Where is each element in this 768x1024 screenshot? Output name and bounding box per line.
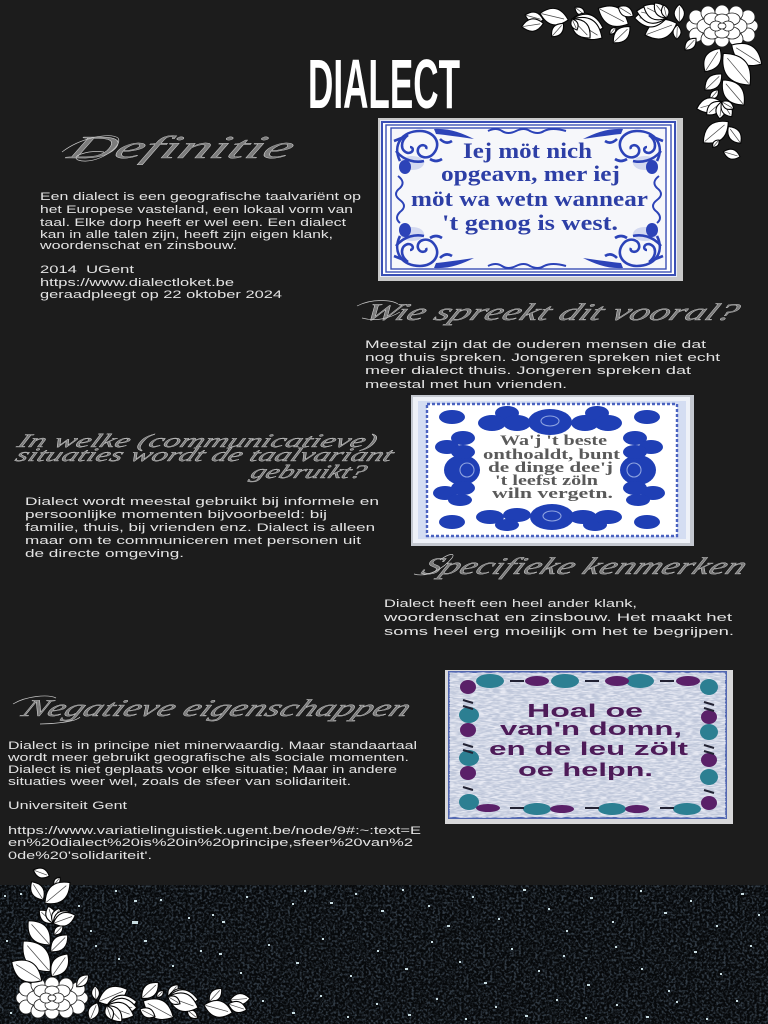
tile 1 text [411,138,648,235]
tile 3 text: van'n domn, [500,719,682,739]
text block: negatieve eigenschappen: situaties weer wel, zoals de sfeer van solidariteit. [8,776,351,788]
text block: negatieve eigenschappen: https://www.variatielinguistiek.ugent.be/node/9#:~:text=E [8,825,421,837]
tile 2 text: Wa'j 't beste [500,433,608,449]
heading: in welke situaties: situaties wordt de taalvariant [12,445,398,466]
tile 2 text [483,433,620,502]
text block: negatieve eigenschappen [6,740,421,862]
text block: specifieke kenmerken: Dialect heeft een heel ander klank, [384,598,637,610]
tile 1: blue delft saying [378,118,683,281]
text block: definitie [38,191,361,301]
tile 1 text: Iej möt nich [463,138,592,163]
heading: in welke situaties [12,431,398,483]
tile 1 text: möt wa wetn wannear [411,186,648,211]
section: definitie [38,131,361,301]
text block: specifieke kenmerken [382,598,734,638]
text block: definitie: 2014 UGent [40,264,134,276]
text block: definitie: kan in alle talen zijn, heeft zijn eigen klank, [40,229,333,241]
heading: in welke situaties: gebruikt? [247,462,371,483]
text block: definitie: woordenschat en zinsbouw. [38,240,237,252]
heading: wie spreekt: Wie spreekt dit vooral? [359,298,746,326]
tile 3 text: en de leu zölt [489,739,688,759]
text block: in welke situaties: de directe omgeving. [25,548,184,560]
heading: specifieke kenmerken [414,552,753,580]
tile 2 text: 't leefst zöln [495,473,598,489]
text block: wie spreekt: nog thuis spreken. Jongeren spreken niet echt [365,352,720,364]
text block: definitie: het Europese vasteland, een lokaal vorm van [40,204,353,216]
text block: in welke situaties: familie, thuis, bij vrienden enz. Dialect is alleen [25,522,375,534]
tile 1 text: opgeavn, mer iej [441,161,620,186]
text block: definitie: Een dialect is een geografische taalvariënt op [40,191,361,203]
tile 2 text: wiln vergetn. [492,486,613,502]
text block: in welke situaties: Dialect wordt meestal gebruikt bij informele en [25,496,379,508]
tile 3 text [489,701,688,780]
section: specifieke kenmerken [382,552,753,638]
tile 3 text: oe helpn. [518,760,653,780]
text block: in welke situaties: persoonlijke momenten bijvoorbeeld: bij [25,509,327,521]
text block: in welke situaties [25,496,379,560]
text block: negatieve eigenschappen: Universiteit Gent [8,800,127,812]
section: wie spreekt dit vooral [357,298,746,391]
text block: specifieke kenmerken: woordenschat en zinsbouw. Het maakt het [382,612,732,624]
tile 3: teal and purple saying [445,670,733,824]
text block: in welke situaties: maar om te communiceren met personen uit [25,535,361,547]
text block: wie spreekt: meestal met hun vrienden. [365,379,567,391]
floral corner: top right [521,0,767,161]
text block: definitie: taal. Elke dorp heeft er wel een. Een dialect [40,217,346,229]
heading: negatieve eigenschappen [13,694,417,724]
text block: wie spreekt: Meestal zijn dat de ouderen mensen die dat [365,339,706,351]
heading: specifieke kenmerken: Specifieke kenmerken [417,552,753,580]
section: negatieve eigenschappen [6,694,421,862]
text block: definitie: geraadpleegt op 22 oktober 2024 [40,289,282,301]
heading: in welke situaties: In welke (communicatieve) [12,431,382,452]
section: in welke situaties [12,431,398,560]
tile 1 text: 't genog is west. [442,210,618,235]
text block: negatieve eigenschappen: 0de%20'solidariteit'. [8,850,152,862]
text block: specifieke kenmerken: soms heel erg moeilijk om het te begrijpen. [384,626,734,638]
text block: negatieve eigenschappen: wordt meer gebruikt geografische als sociale momenten. [6,752,409,764]
text block: definitie: https://www.dialectloket.be [40,277,234,289]
tile 2 text: de dinge dee'j [488,460,613,476]
text block: negatieve eigenschappen: en%20dialect%20is%20in%20principe,sfeer%20van%2 [8,837,413,849]
text block: wie spreekt: meer dialect thuis. Jongeren spreken dat [365,365,691,377]
text block: negatieve eigenschappen: Dialect is niet geplaats voor elke situatie; Maar in andere [8,764,397,776]
title: DIALECT [308,45,460,123]
heading: negatieve eigenschappen: Negatieve eigenschappen [16,694,417,722]
glitter band at the bottom [0,885,768,1024]
tile 3 text: Hoal oe [527,701,643,721]
floral corner: bottom left [6,866,250,1024]
text block: wie spreekt [365,339,720,391]
heading: definitie [60,131,302,165]
text block: negatieve eigenschappen: Dialect is in principe niet minerwaardig. Maar standaartaal [8,740,417,752]
tile 2: blue floral saying [411,395,694,546]
heading: wie spreekt [357,298,746,326]
heading: definitie: Definitie [60,131,302,165]
tile 2 text: onthoaldt, bunt [483,447,620,463]
